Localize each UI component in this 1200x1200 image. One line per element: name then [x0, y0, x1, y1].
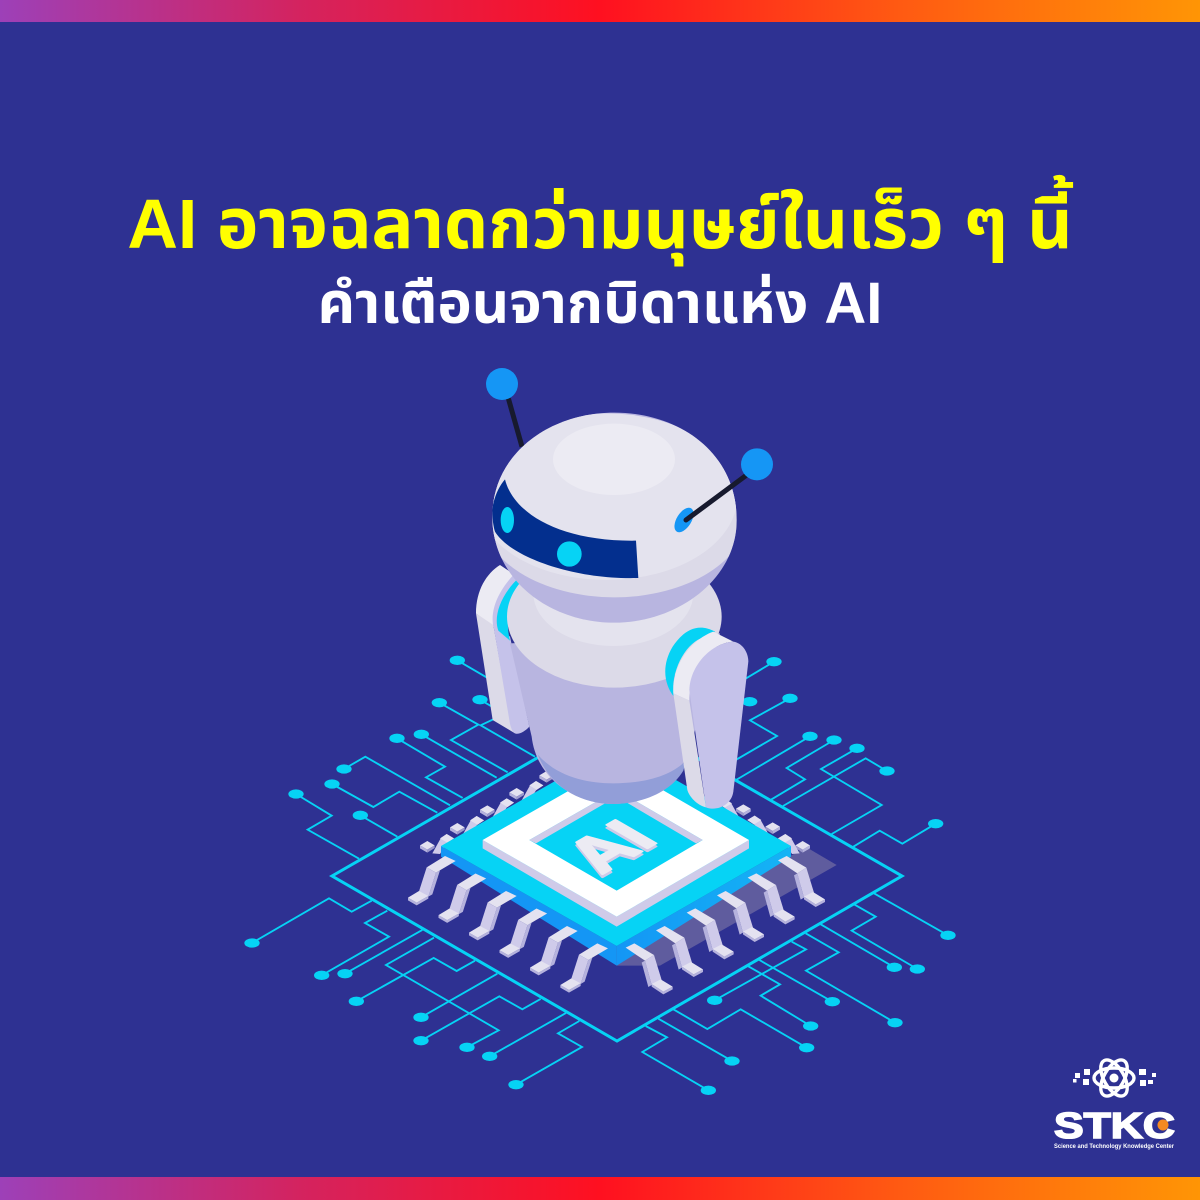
- robot body: [507, 541, 722, 804]
- logo atom icon: [1094, 1056, 1134, 1100]
- logo wordmark: STKC: [1054, 1105, 1175, 1146]
- right circuit traces: [642, 657, 956, 1095]
- bottom gradient bar: [0, 1177, 1200, 1200]
- side antenna: [671, 448, 773, 535]
- robot head: [476, 413, 748, 623]
- left circuit traces: [244, 656, 582, 1089]
- chip shadow: [617, 847, 837, 966]
- back pins: [420, 771, 810, 854]
- front left pins: [408, 856, 608, 993]
- chip top surface: [441, 746, 791, 946]
- subtitle: คำเตือนจากบิดาแห่ง AI: [318, 271, 882, 336]
- back antenna: [486, 368, 522, 447]
- chip left side: [441, 846, 617, 966]
- top gradient bar: [0, 0, 1200, 22]
- chip right side: [617, 846, 791, 966]
- robot visor: [492, 479, 638, 578]
- circuit board traces: [244, 656, 956, 1095]
- logo tagline: Science and Technology Knowledge Center: [1054, 1144, 1175, 1150]
- front right pins: [626, 856, 825, 994]
- robot left arm: [476, 565, 529, 734]
- STKC logo: [1054, 1056, 1175, 1150]
- main diamond outline: [332, 712, 902, 1041]
- logo orange dot: [1158, 1120, 1168, 1130]
- chip AI lettering: AI: [548, 813, 673, 886]
- white frame: [483, 763, 749, 927]
- robot right arm: [665, 628, 748, 809]
- title: AI อาจฉลาดกว่ามนุษย์ในเร็ว ๆ นี้: [127, 175, 1073, 266]
- robot: [476, 368, 773, 809]
- logo pixel squares: [1073, 1069, 1156, 1086]
- chip AI lettering: AI: [548, 810, 673, 883]
- AI processor chip: [408, 746, 837, 994]
